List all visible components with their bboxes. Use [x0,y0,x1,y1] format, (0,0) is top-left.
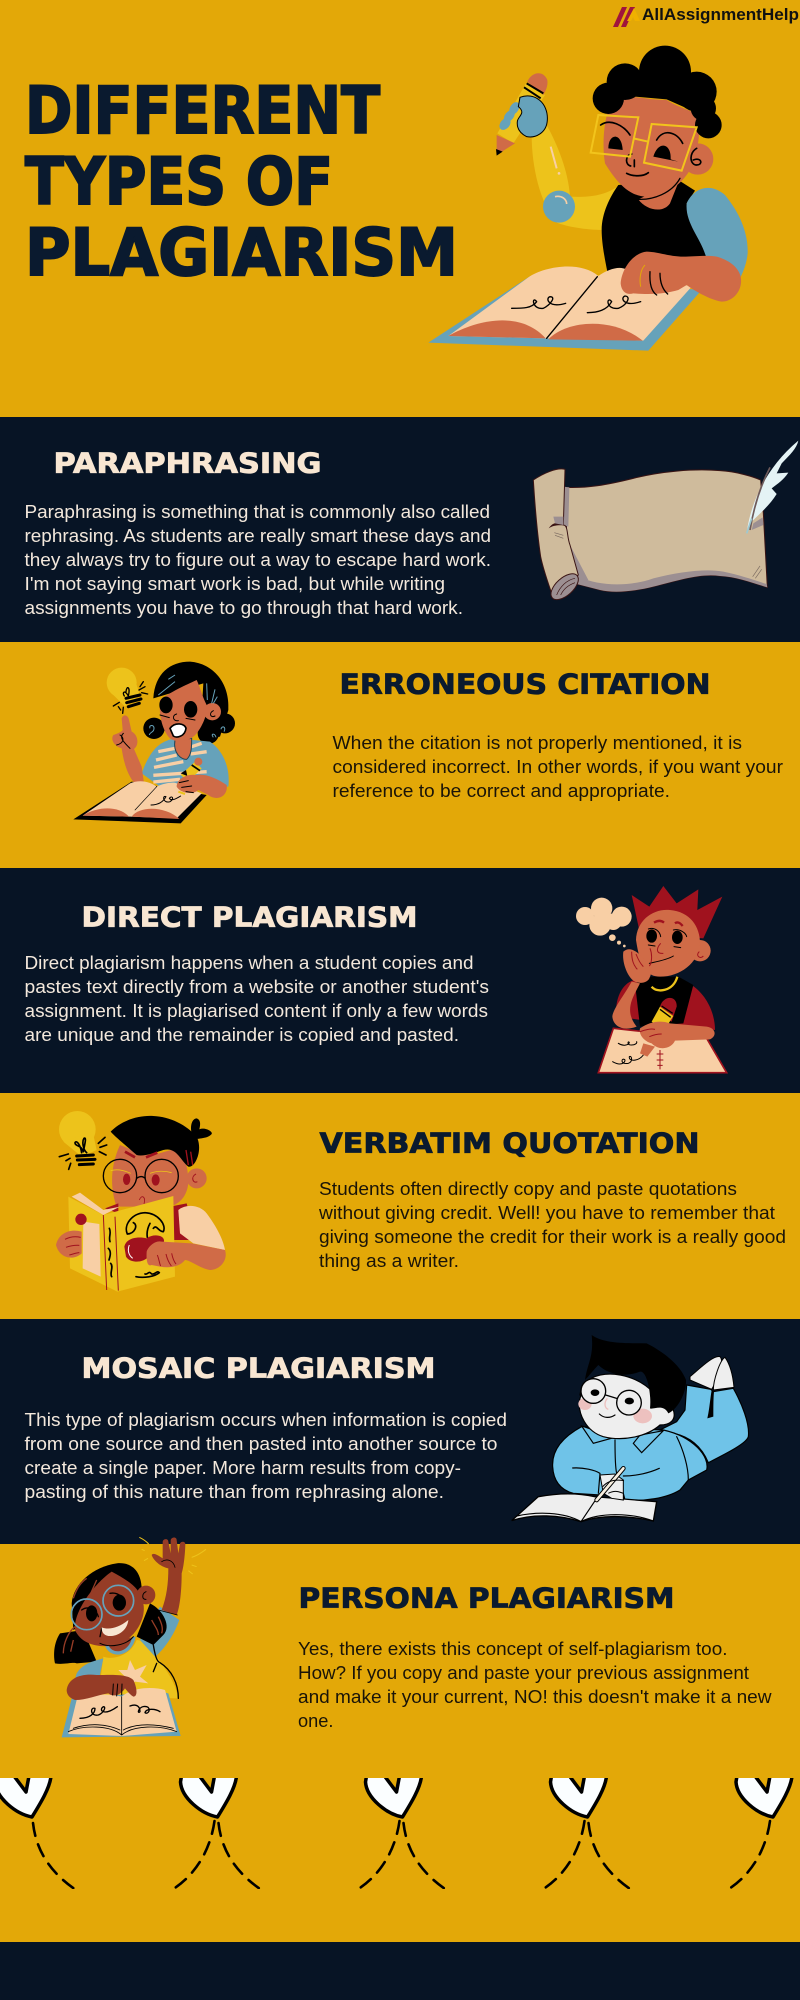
text block: persona plagiarism: one. [298,1711,334,1731]
illustration: boy thinking with thought bubble [576,886,727,1073]
heading: persona plagiarism: PERSONA PLAGIARISM [298,1582,674,1614]
text block: mosaic plagiarism: This type of plagiarism occurs when information is copied [24,1410,507,1430]
text block: paraphrasing: they always try to figure out a way to escape hard work. [24,550,491,570]
text block: persona plagiarism: How? If you copy and paste your previous assignment [298,1663,749,1683]
panel: persona plagiarism [0,1536,794,1889]
illustration: student reading with pencil [428,46,748,351]
text block: paraphrasing: I'm not saying smart work is bad, but while writing [24,574,445,594]
icon: heart 3 [359,1778,446,1889]
text block: verbatim quotation: without giving credit. Well! you have to remember that [318,1203,775,1223]
text block: paraphrasing [24,502,491,618]
text block: mosaic plagiarism [24,1410,507,1502]
icon: heart 4 [544,1778,630,1889]
text block: erroneous citation: reference to be correct and appropriate. [332,781,670,801]
text block: mosaic plagiarism: from one source and then pasted into another source to [24,1434,498,1454]
text block: direct plagiarism: are unique and the remainder is copied and pasted. [24,1025,459,1045]
text block: erroneous citation: considered incorrect. In other words, if you want your [332,757,783,777]
heading: direct plagiarism: DIRECT PLAGIARISM [82,900,418,934]
illustration: boy lying down writing [512,1335,749,1522]
text block: mosaic plagiarism: pasting of this nature than from rephrasing alone. [24,1482,444,1502]
text block: direct plagiarism [24,953,489,1045]
icon: heart 2 [174,1778,260,1889]
title: PLAGIARISM [25,216,458,291]
panel: direct plagiarism [0,868,800,1093]
text block: erroneous citation: When the citation is not properly mentioned, it is [332,733,742,753]
panel: footer band [0,1942,800,2000]
text block: paraphrasing: rephrasing. As students are really smart these days and [24,526,491,546]
text block: persona plagiarism [298,1639,773,1731]
text block: verbatim quotation: thing as a writer. [319,1251,459,1271]
text block: mosaic plagiarism: create a single paper. More harm results from copy- [24,1458,461,1478]
illustration: boy with glasses reading a book [56,1111,226,1292]
text block: verbatim quotation [318,1179,786,1271]
text block: persona plagiarism: and make it your current, NO! this doesn't make it a new [298,1687,773,1707]
heading: erroneous citation: ERRONEOUS CITATION [340,668,710,700]
illustration: girl raising her hand [54,1537,206,1737]
illustration: girl with idea light bulb [73,662,235,823]
panel: paraphrasing [0,417,800,642]
panel: header [0,0,800,417]
title: TYPES OF [25,145,333,220]
heading: mosaic plagiarism: MOSAIC PLAGIARISM [82,1352,436,1384]
text block: direct plagiarism: pastes text directly from a website or another student's [24,977,489,997]
text block: verbatim quotation: giving someone the credit for their work is a really good [319,1227,786,1247]
text block: persona plagiarism: Yes, there exists this concept of self-plagiarism too. [298,1639,728,1659]
icon: heart 1 [0,1778,75,1889]
text block: direct plagiarism: Direct plagiarism happens when a student copies and [24,953,474,973]
panel: mosaic plagiarism [0,1319,800,1544]
title [25,74,458,291]
text block: direct plagiarism: assignment. It is plagiarised content if only a few words [24,1001,488,1021]
decorative hearts with dashed strings [0,1776,792,1895]
heading: verbatim quotation: VERBATIM QUOTATION [320,1126,700,1160]
text block: paraphrasing: Paraphrasing is something that is commonly also called [24,502,490,522]
logo: AllAssignmentHelp: AllAssignmentHelp [642,5,799,24]
text block: erroneous citation [332,733,783,801]
illustration: parchment scroll and feather quill [533,441,798,604]
panel: erroneous citation [0,642,800,868]
title: DIFFERENT [25,74,380,149]
heading: paraphrasing: PARAPHRASING [54,446,322,480]
text block: verbatim quotation: Students often directly copy and paste quotations [319,1179,737,1199]
panel: verbatim quotation [0,1093,800,1319]
text block: paraphrasing: assignments you have to go through that hard work. [24,598,463,618]
icon: heart 5 [730,1778,794,1889]
